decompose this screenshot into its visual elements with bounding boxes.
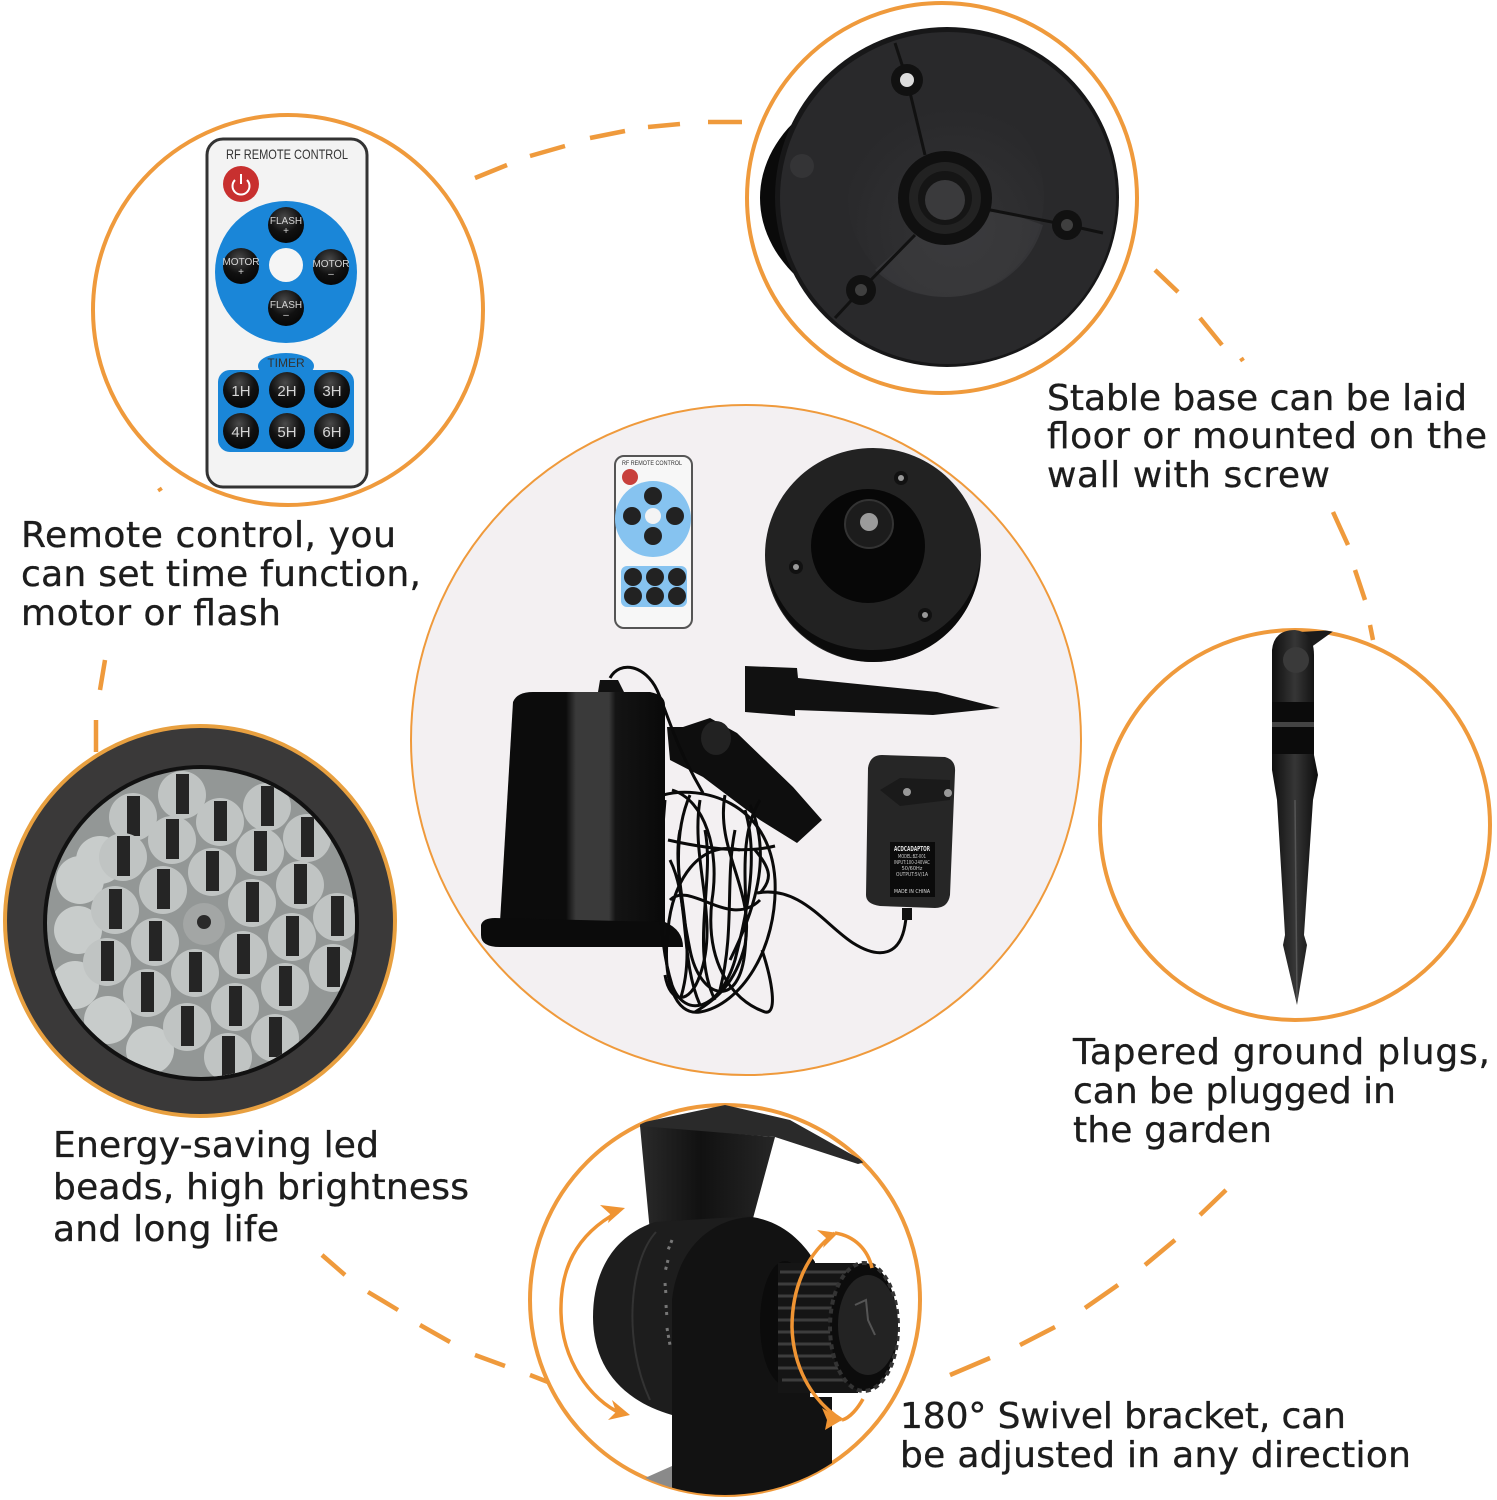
panel: remote control close-up: FLASH [270,300,302,311]
caption: stable base: wall with screw [1047,455,1330,496]
power adapter: INPUT:100-240VAC [894,860,930,866]
panel: LED beads close-up [5,726,395,1116]
panel: remote control close-up: – [283,310,289,321]
panel: remote control close-up: 2H [277,383,297,400]
power adapter: MODEL:BZ-001 [898,854,926,860]
panel: remote control close-up: FLASH [270,216,302,227]
panel: remote control close-up: RF REMOTE CONTROL [226,146,348,162]
panel: stable base close-up [747,3,1137,393]
neck [640,1126,775,1232]
small remote [615,456,692,628]
caption: ground plugs: can be plugged in [1073,1071,1396,1112]
dashed connector ring [96,122,1373,1382]
caption: stable base: floor or mounted on the [1047,416,1487,457]
power adapter: OUTPUT:5V/1A [896,872,929,878]
caption: swivel bracket [900,1396,1411,1476]
drum [593,1218,720,1415]
panel: remote control close-up: + [238,267,244,278]
lens array [51,771,361,1081]
caption: remote control: Remote control, you [21,515,396,556]
caption: LED beads: Energy-saving led [53,1125,379,1166]
panel: remote control close-up: – [328,269,334,280]
cables [610,667,907,1012]
small remote: RF REMOTE CONTROL [622,461,683,467]
caption: stable base [1047,378,1487,496]
panel: remote control close-up: 4H [231,424,251,441]
panel: remote control close-up [93,115,483,505]
power adapter: MADE IN CHINA [894,889,930,895]
caption: ground plugs: Tapered ground plugs, [1072,1032,1490,1073]
caption: remote control [21,515,421,634]
panel: remote control close-up: MOTOR [312,259,350,270]
ground spike [745,666,1000,716]
caption: ground plugs: the garden [1073,1110,1272,1151]
panel: remote control close-up: TIMER [267,356,305,370]
panel: ground plug close-up [1100,630,1490,1020]
panel: remote control close-up: MOTOR [222,257,260,268]
panel: centre product photo [411,405,1081,1075]
mounting plate [640,1105,865,1164]
projector body [481,680,683,947]
caption: swivel bracket: be adjusted in any direction [900,1435,1411,1476]
panel: remote control close-up: 6H [322,424,342,441]
column [672,1217,832,1500]
caption: stable base: Stable base can be laid [1047,378,1467,419]
panel: remote control close-up: 5H [277,424,297,441]
caption: LED beads [53,1125,469,1250]
panel: remote control close-up: + [283,226,289,237]
knob [760,1261,810,1385]
base plate [765,448,981,662]
panel: remote control close-up: 1H [231,383,251,400]
power adapter: ACDCADAPTOR [894,845,930,853]
caption: swivel bracket: 180° Swivel bracket, can [900,1396,1346,1437]
power adapter: 50/60Hz [902,866,923,872]
caption: remote control: motor or flash [21,593,281,634]
bracket [667,718,822,843]
panel: swivel bracket close-up [530,1105,920,1500]
panel: remote control close-up: 3H [322,383,342,400]
caption: remote control: can set time function, [21,554,421,595]
caption: ground plugs [1072,1032,1490,1151]
rotation arrows [561,1212,872,1420]
caption: LED beads: and long life [53,1209,279,1250]
power adapter [866,755,955,920]
caption: LED beads: beads, high brightness [53,1167,469,1208]
